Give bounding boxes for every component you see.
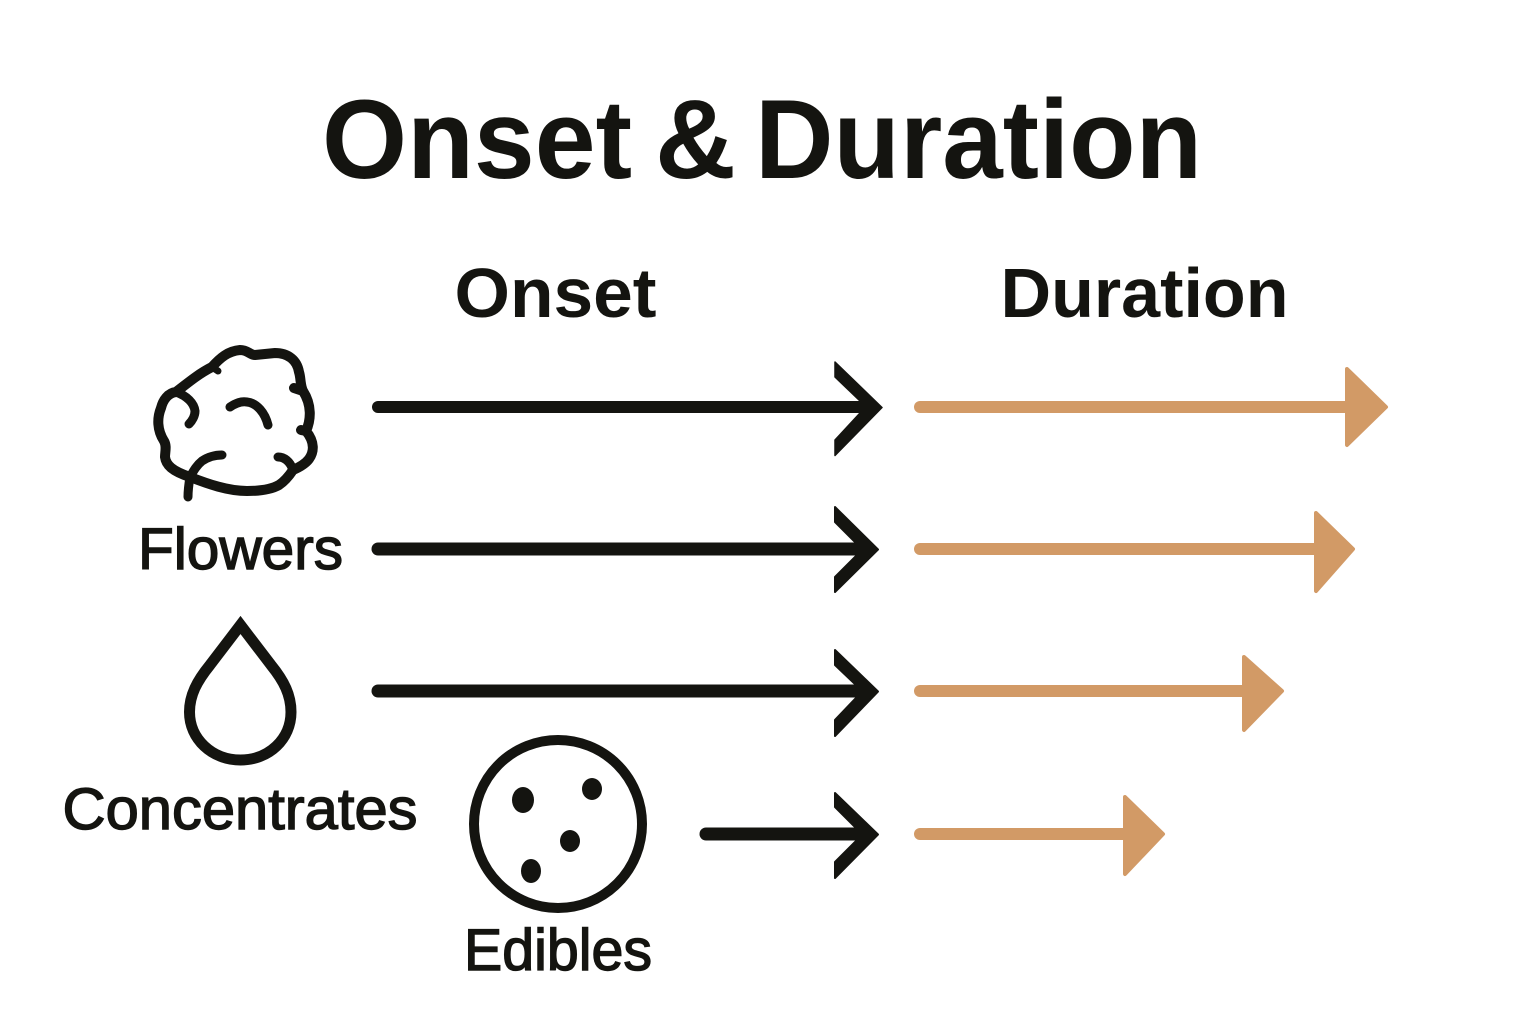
duration arrow: flowers [920, 369, 1386, 445]
onset arrow: concentrates [378, 650, 878, 736]
icon: edible [474, 740, 642, 908]
onset arrow: edibles [706, 793, 878, 878]
title: & [655, 77, 736, 202]
onset arrow: flowers [378, 362, 882, 456]
title: Duration [755, 77, 1202, 202]
title: Onset [322, 77, 632, 202]
label: Edibles: Edibles [464, 918, 652, 983]
icon: flower bud [158, 350, 313, 497]
heading: Duration: Duration [1000, 254, 1288, 332]
title [322, 77, 1202, 202]
duration arrow: edibles [920, 797, 1163, 874]
icon: droplet [190, 625, 291, 760]
duration arrow: concentrates [920, 657, 1282, 730]
duration arrow: row 2 [920, 513, 1353, 591]
onset arrow: row 2 [378, 507, 878, 592]
label: Flowers: Flowers [138, 517, 343, 582]
label: Concentrates: Concentrates [62, 777, 418, 842]
heading: Onset: Onset [454, 254, 656, 332]
